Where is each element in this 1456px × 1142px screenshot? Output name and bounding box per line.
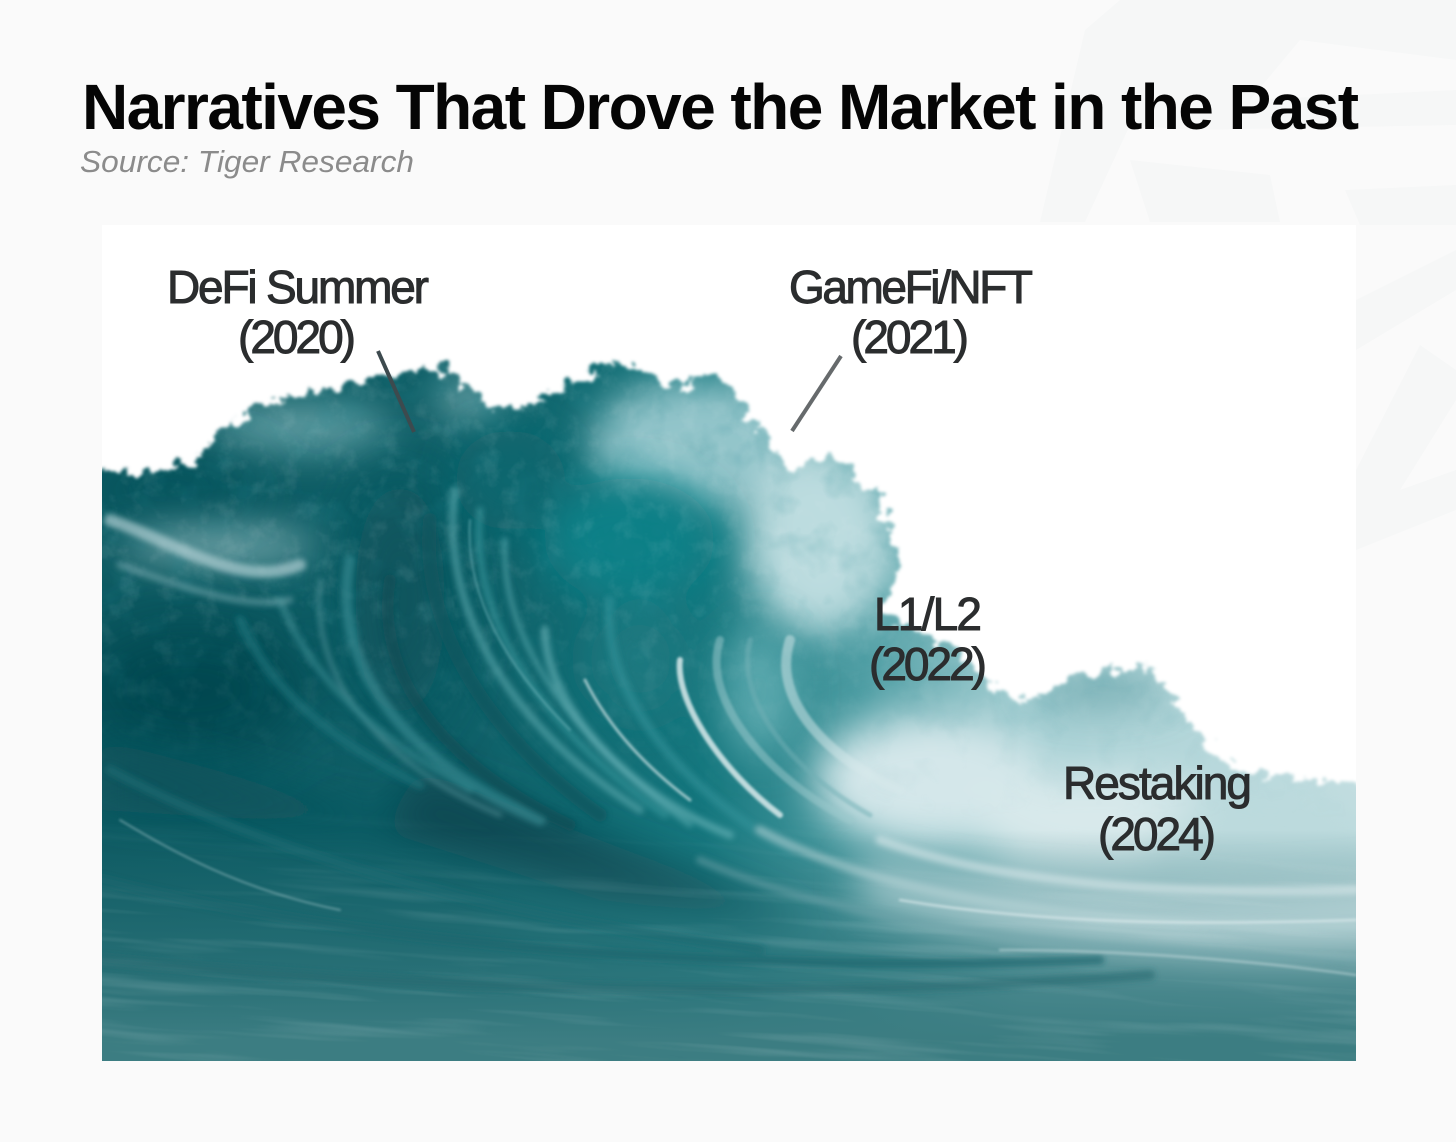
- deep shadow left: [70, 466, 445, 760]
- label: L1/L2 (2022): (2022): [869, 638, 987, 690]
- label: Restaking (2024): Restaking: [1063, 757, 1252, 809]
- label: Restaking (2024): [1063, 757, 1252, 860]
- mottled texture: [102, 363, 1178, 730]
- label: GameFi/NFT (2021): [789, 261, 1033, 363]
- title: Narratives That Drove the Market in the Past: [82, 71, 1359, 143]
- arrow: GameFi/NFT pointer: [792, 356, 841, 431]
- white curl lines: [120, 520, 1356, 975]
- label: DeFi Summer (2020): [167, 261, 429, 363]
- dark trough: [388, 778, 781, 922]
- label: DeFi Summer (2020): (2020): [238, 311, 356, 363]
- light swell lower right: [860, 860, 1400, 953]
- source note: Source: Tiger Research: [80, 144, 414, 179]
- label: Restaking (2024): (2024): [1098, 808, 1216, 860]
- arrow: DeFi Summer pointer: [378, 351, 414, 432]
- lower sea: [102, 838, 1356, 1061]
- white water: [108, 502, 1218, 878]
- label: GameFi/NFT (2021): GameFi/NFT: [789, 261, 1033, 313]
- label: DeFi Summer (2020): DeFi Summer: [167, 261, 429, 313]
- label: L1/L2 (2022): [869, 588, 987, 690]
- watermark background logo: [1040, 0, 1456, 550]
- label: L1/L2 (2022): L1/L2: [874, 588, 982, 640]
- bright barrel: [455, 430, 795, 755]
- panel: wave illustration: [102, 358, 1356, 1061]
- crest foam: [205, 378, 1170, 706]
- label: GameFi/NFT (2021): (2021): [851, 311, 969, 363]
- wave image: [102, 358, 1356, 1061]
- water streaks: left flank: [102, 490, 1356, 989]
